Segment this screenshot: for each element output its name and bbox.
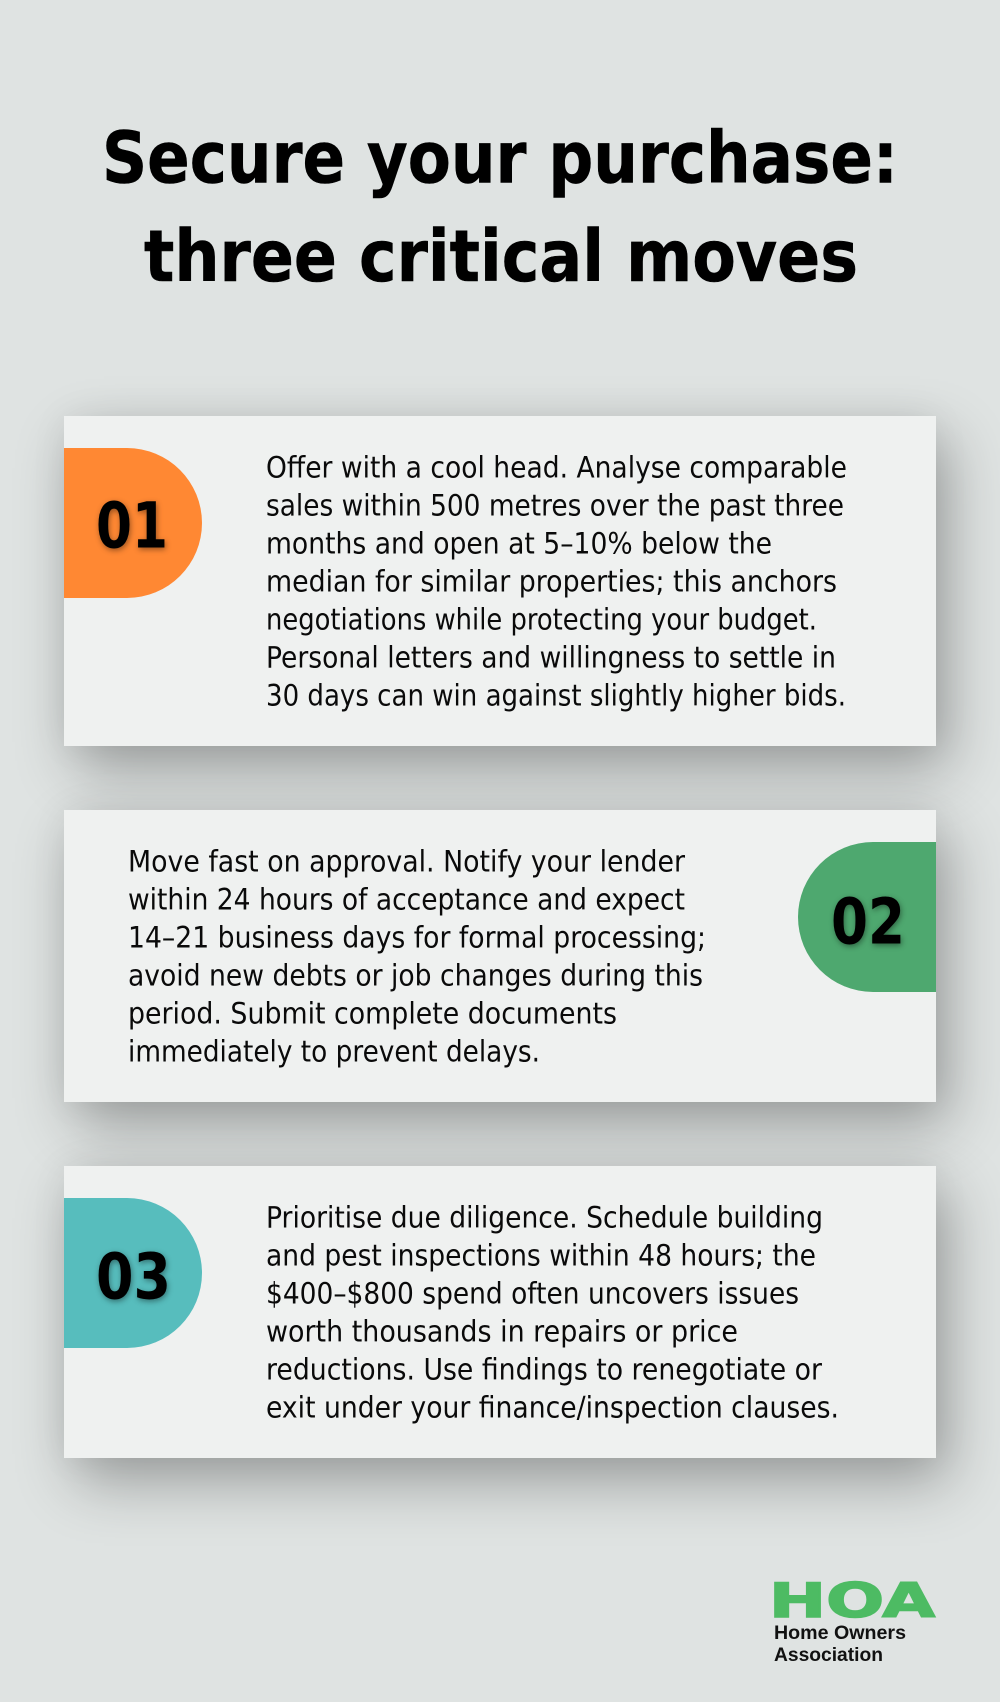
- text block: step 03: and pest inspections within 48 hours; the: [266, 1238, 816, 1272]
- logo: Home Owners Association: HOA: [769, 1574, 936, 1629]
- text block: step 02: [128, 844, 706, 1068]
- text block: step 01: months and open at 5–10% below the: [266, 526, 772, 560]
- text block: step 01: [266, 450, 847, 712]
- text block: step 03: $400–$800 spend often uncovers issues: [266, 1276, 799, 1310]
- title: [102, 116, 898, 298]
- panel: step 01 card: [64, 416, 936, 746]
- text block: step 01: Personal letters and willingness to settle in: [266, 640, 836, 674]
- text block: step 02: within 24 hours of acceptance and expect: [128, 882, 685, 916]
- text block: step 01: median for similar properties; this anchors: [266, 564, 837, 598]
- text block: step 02: 14–21 business days for formal processing;: [128, 920, 706, 954]
- text block: step 01: negotiations while protecting your budget.: [266, 602, 817, 636]
- logo: Home Owners Association: Association: [774, 1645, 883, 1666]
- title: three critical moves: [144, 215, 858, 298]
- panel: step 02 card: [64, 810, 936, 1102]
- text block: step 03: reductions. Use findings to renegotiate or: [266, 1352, 822, 1386]
- badge: step 02 green tab: [798, 842, 936, 992]
- text block: step 02: Move fast on approval. Notify your lender: [128, 844, 685, 878]
- number 02: 02: [831, 886, 905, 958]
- badge: step 01 orange tab: [64, 448, 202, 598]
- text block: step 01: 30 days can win against slightly higher bids.: [266, 678, 846, 712]
- number 01: 01: [96, 490, 168, 562]
- panel: step 03 card: [64, 1166, 936, 1458]
- title: Secure your purchase:: [102, 116, 898, 200]
- number 03: 03: [96, 1240, 171, 1314]
- text block: step 02: period. Submit complete documents: [128, 996, 617, 1030]
- text block: step 03: Prioritise due diligence. Schedule building: [266, 1200, 823, 1234]
- text block: step 03: exit under your finance/inspection clauses.: [266, 1390, 839, 1424]
- logo: Home Owners Association: Home Owners: [774, 1623, 906, 1644]
- text block: step 02: avoid new debts or job changes during this: [128, 958, 703, 992]
- logo: Home Owners Association: [769, 1574, 936, 1666]
- text block: step 01: Offer with a cool head. Analyse comparable: [266, 450, 847, 484]
- text block: step 03: [266, 1200, 839, 1424]
- badge: step 03 teal tab: [64, 1198, 202, 1348]
- text block: step 02: immediately to prevent delays.: [128, 1034, 540, 1068]
- text block: step 03: worth thousands in repairs or price: [266, 1314, 738, 1348]
- text block: step 01: sales within 500 metres over the past three: [266, 488, 844, 522]
